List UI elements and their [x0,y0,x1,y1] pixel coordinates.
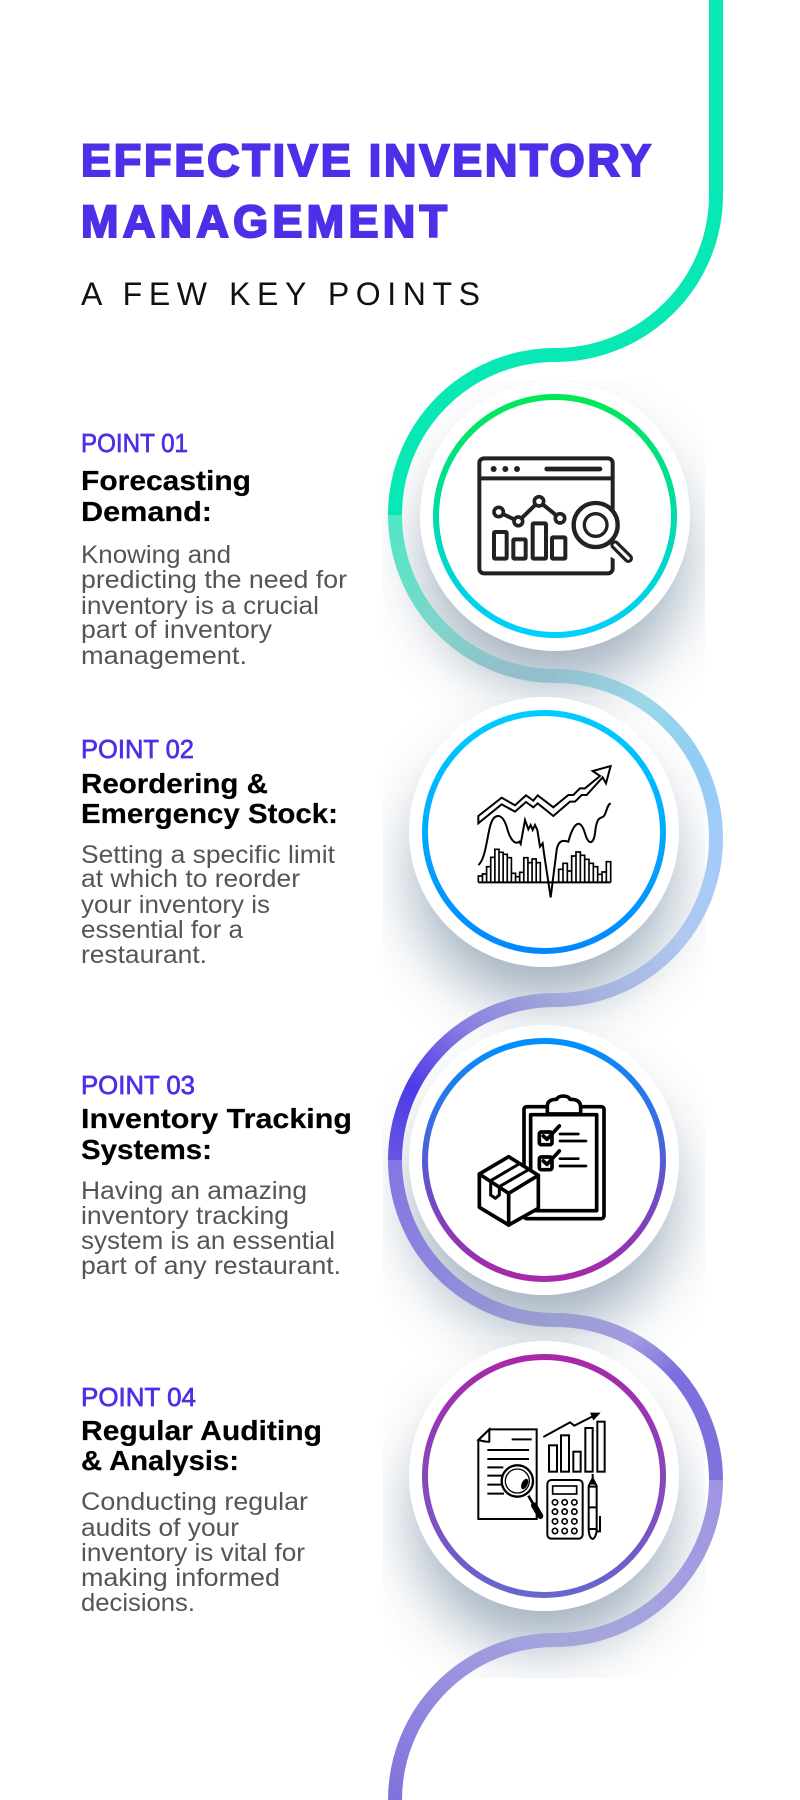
point 02 body: your inventory is [81,891,270,919]
point 04 body: Conducting regular [81,1488,308,1516]
point 01 body: inventory is a crucial [81,592,319,620]
point 04 body: decisions. [81,1589,195,1617]
circle 3 [409,1025,679,1295]
title: MANAGEMENT [81,196,447,247]
title [81,135,651,247]
point 03 heading: Systems: [81,1134,212,1165]
point 03 label: POINT 03 [81,1072,195,1100]
point 01 heading: Forecasting [81,465,251,496]
drop shadows under circles [414,426,685,1646]
point 02 label: POINT 02 [81,736,194,764]
point 02 heading: Reordering & [81,768,268,799]
circle 2 [409,697,679,967]
point 03 body: system is an essential [81,1227,335,1255]
point 03 body: inventory tracking [81,1202,289,1230]
point 02 body: at which to reorder [81,865,300,893]
point 04 body [81,1488,308,1617]
point 04 body: audits of your [81,1514,239,1542]
point 03 body [81,1177,341,1280]
point 02 body: Setting a specific limit [81,841,335,869]
panel: point 04 text [81,1384,322,1617]
icon: clipboard and box [479,1096,604,1225]
point 01 body: Knowing and [81,541,231,569]
subtitle: A FEW KEY POINTS [81,276,480,312]
point 01 body: management. [81,642,247,670]
point 04 heading: & Analysis: [81,1445,239,1476]
point 01 heading: Demand: [81,496,212,527]
point 04 heading: Regular Auditing [81,1415,322,1446]
circle 4 [409,1341,679,1611]
panel: point 03 text [81,1072,352,1280]
point 04 body: inventory is vital for [81,1539,305,1567]
point 03 body: Having an amazing [81,1177,307,1205]
icon: dashboard with magnifier [479,458,628,573]
point 01 label: POINT 01 [81,430,188,458]
winding gradient path [395,0,716,1800]
point 04 body: making informed [81,1564,280,1592]
point 03 body: part of any restaurant. [81,1252,341,1280]
point 01 body: predicting the need for [81,566,347,594]
panel: point 01 text [81,430,347,670]
panel: point 02 text [81,736,338,969]
point 03 heading: Inventory Tracking [81,1103,352,1134]
title: EFFECTIVE INVENTORY [81,135,651,186]
point 02 heading: Emergency Stock: [81,798,338,829]
point 04 label: POINT 04 [81,1384,196,1412]
point 01 body: part of inventory [81,616,273,644]
point 01 heading [81,465,251,527]
point 04 heading [81,1415,322,1476]
icon: market trend chart [478,766,611,897]
icon: audit documents, chart and calculator [478,1413,605,1539]
circle 1 [420,381,690,651]
point 03 heading [81,1103,352,1165]
point 02 heading [81,768,338,829]
point 02 body: essential for a [81,916,243,944]
point 02 body: restaurant. [81,941,207,969]
point 02 body [81,841,335,969]
point 01 body [81,541,347,670]
